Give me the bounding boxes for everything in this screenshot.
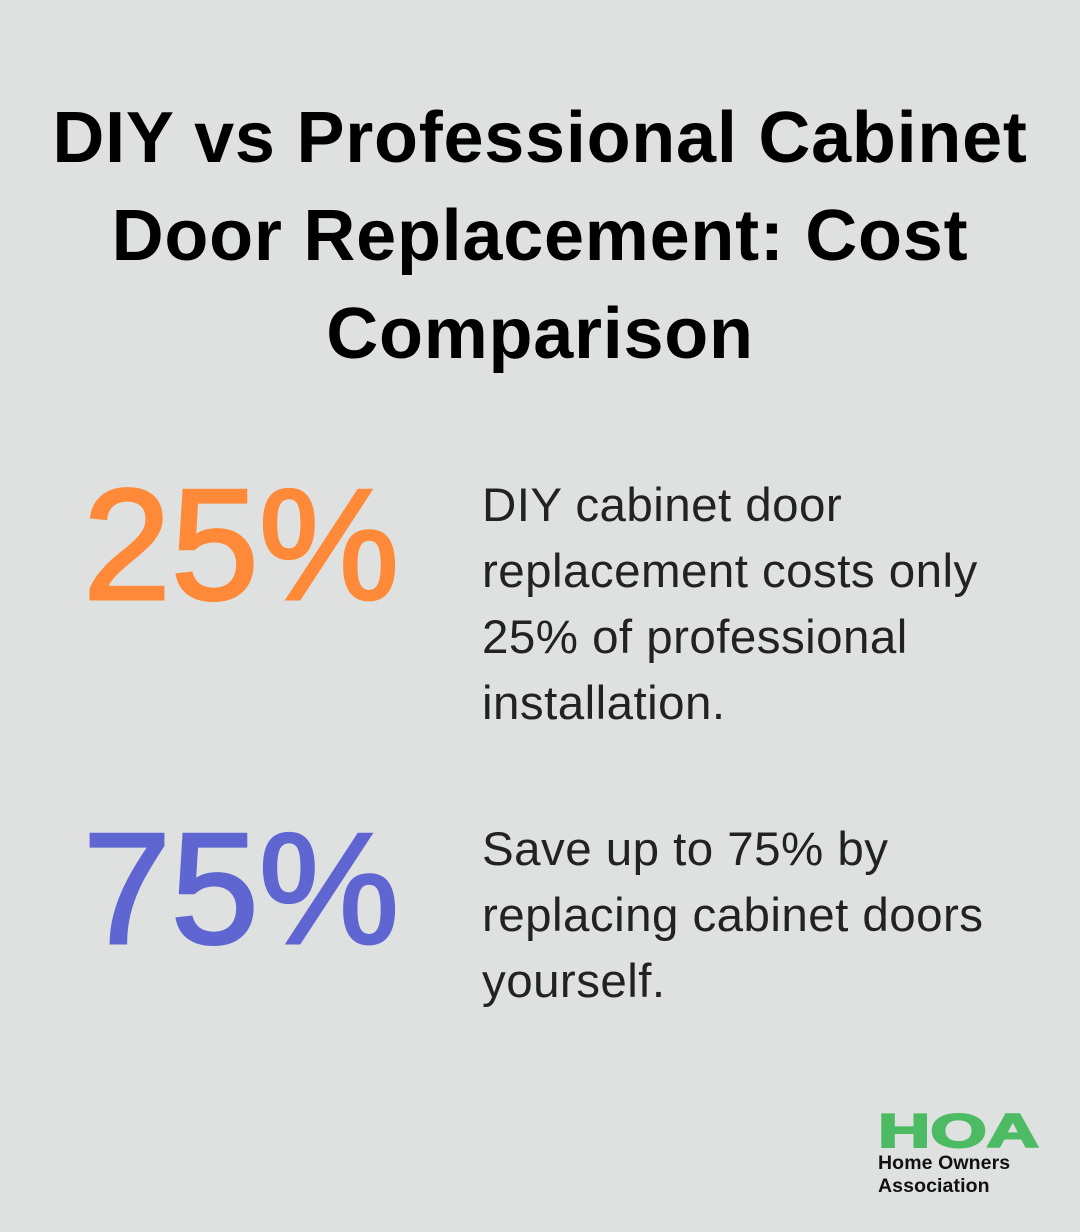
text: 75% description — [482, 823, 984, 1008]
text: 25% description: replacement costs only — [482, 545, 978, 598]
logo subtitle: Association — [878, 1175, 990, 1197]
stat: 25%: 25% — [83, 457, 399, 633]
text: 25% description: DIY cabinet door — [482, 479, 842, 532]
stat: 75%: 75% — [83, 801, 399, 977]
title: Door Replacement: Cost — [112, 196, 968, 276]
text: 75% description: replacing cabinet doors — [482, 889, 984, 942]
text: 75% description: yourself. — [482, 955, 666, 1008]
title: DIY vs Professional Cabinet — [52, 98, 1028, 178]
title — [52, 98, 1028, 374]
text: 25% description — [482, 479, 978, 730]
text: 25% description: 25% of professional — [482, 611, 908, 664]
logo subtitle — [878, 1152, 1010, 1197]
logo: HOA — [878, 1112, 1040, 1197]
text: 75% description: Save up to 75% by — [482, 823, 888, 876]
logo subtitle: Home Owners — [878, 1152, 1010, 1174]
title: Comparison — [326, 294, 754, 374]
text: 25% description: installation. — [482, 677, 726, 730]
